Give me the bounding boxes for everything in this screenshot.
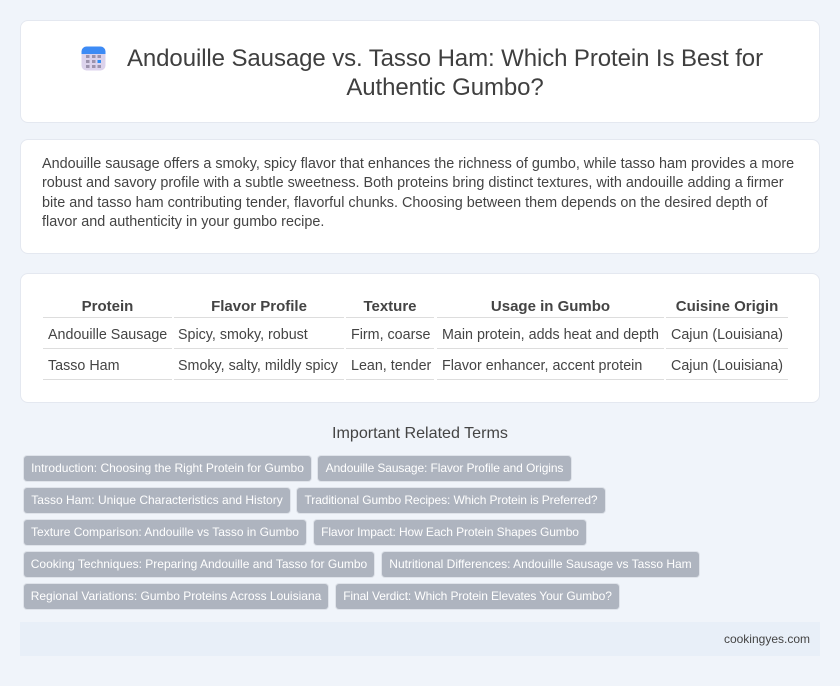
comparison table: Cuisine Origin [676, 298, 778, 315]
panel: summary card [20, 139, 820, 254]
related terms tags: Andouille Sausage: Flavor Profile and Origins [326, 461, 563, 475]
comparison table: Smoky, salty, mildly spicy [178, 358, 338, 374]
summary text: flavor and authenticity in your gumbo recipe. [42, 214, 324, 230]
related terms tags: Introduction: Choosing the Right Protein for Gumbo [31, 461, 304, 475]
footer bar [20, 622, 820, 656]
icon: calendar [82, 46, 106, 70]
related terms tags: Regional Variations: Gumbo Proteins Across Louisiana [31, 589, 321, 603]
comparison table: Cajun (Louisiana) [671, 327, 783, 343]
related terms tags: Flavor Impact: How Each Protein Shapes Gumbo [321, 525, 579, 539]
comparison table [43, 298, 788, 380]
title [127, 45, 763, 100]
related terms tags [23, 455, 700, 610]
comparison table: Flavor Profile [211, 298, 307, 315]
comparison table: Cajun (Louisiana) [671, 358, 783, 374]
footer source text: cookingyes.com [724, 632, 810, 646]
related terms heading: Important Related Terms [332, 424, 508, 442]
related terms tags: Traditional Gumbo Recipes: Which Protein is Preferred? [305, 493, 597, 507]
related terms tags: Tasso Ham: Unique Characteristics and History [31, 493, 283, 507]
summary text [42, 156, 794, 230]
comparison table: Andouille Sausage [48, 327, 167, 343]
comparison table: Protein [82, 298, 133, 315]
related terms tags: Nutritional Differences: Andouille Sausage vs Tasso Ham [389, 557, 692, 571]
title: Andouille Sausage vs. Tasso Ham: Which Protein Is Best for [127, 45, 763, 72]
comparison table: Flavor enhancer, accent protein [442, 358, 642, 374]
comparison table: Usage in Gumbo [491, 298, 610, 315]
summary text: bite and tasso ham contributing tender, flavorful chunks. Choosing between them depends on the desired depth of [42, 195, 768, 211]
comparison table: Main protein, adds heat and depth [442, 327, 659, 343]
comparison table: Spicy, smoky, robust [178, 327, 308, 343]
comparison table: Texture [363, 298, 417, 315]
panel: comparison table card [20, 273, 820, 403]
related terms tags: Texture Comparison: Andouille vs Tasso in Gumbo [31, 525, 299, 539]
related terms tags: Cooking Techniques: Preparing Andouille and Tasso for Gumbo [31, 557, 367, 571]
panel: title card [20, 20, 820, 123]
comparison table: Firm, coarse [351, 327, 430, 343]
related terms tags: Final Verdict: Which Protein Elevates Your Gumbo? [343, 589, 612, 603]
summary text: robust and savory profile with a subtle sweetness. Both proteins bring distinct textures, with andouille adding a firmer [42, 175, 784, 191]
summary text: Andouille sausage offers a smoky, spicy flavor that enhances the richness of gumbo, while tasso ham provides a more [42, 156, 794, 172]
title: Authentic Gumbo? [346, 74, 544, 100]
comparison table: Tasso Ham [48, 358, 120, 374]
comparison table: Lean, tender [351, 358, 431, 374]
